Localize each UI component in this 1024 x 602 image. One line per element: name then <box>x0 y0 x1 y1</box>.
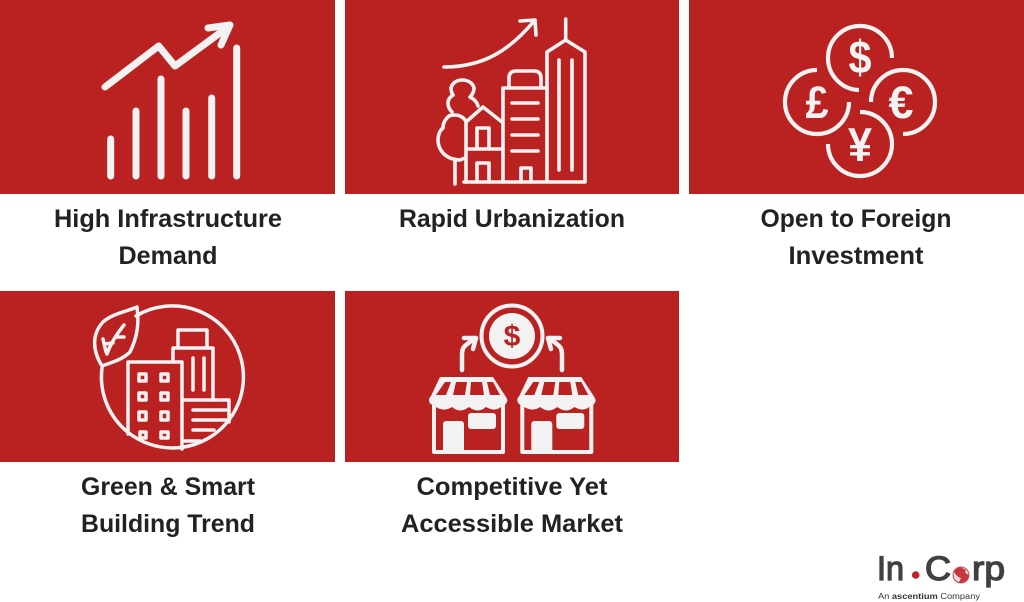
arrows <box>462 338 562 370</box>
panel: competitive yet accessible market <box>345 291 679 538</box>
wordmark: rp <box>972 550 1005 588</box>
wordmark: In <box>877 550 904 588</box>
globe <box>952 566 970 584</box>
icon: rising bar chart with arrow <box>105 25 237 176</box>
heading: Accessible Market <box>401 510 624 538</box>
icon: four currency coins: £ <box>806 77 828 128</box>
heading: Investment <box>788 242 924 270</box>
panel background <box>0 291 335 462</box>
wordmark <box>877 550 1005 588</box>
icon: four currency coins <box>785 26 935 176</box>
logo: InCorp <box>877 550 1005 601</box>
panel background <box>0 0 335 194</box>
panel background <box>345 291 679 462</box>
icon: buildings in circle with leaf <box>95 306 243 449</box>
heading: Open to Foreign <box>760 205 952 233</box>
tagline: An ascentium Company <box>878 591 981 601</box>
red dot <box>912 571 920 579</box>
heading: Building Trend <box>81 510 255 538</box>
panel background <box>689 0 1024 194</box>
panel: high infrastructure demand <box>0 0 335 270</box>
icon: four currency coins: $ <box>848 31 872 83</box>
icon: city skyline with growth arrow <box>438 19 585 184</box>
icon: two shops and a coin <box>429 306 596 453</box>
panel: green and smart building trend <box>0 291 335 538</box>
coin <box>482 306 542 366</box>
heading: Competitive Yet <box>416 473 608 501</box>
left shop <box>429 377 507 453</box>
coin: $ <box>504 320 521 353</box>
heading: High Infrastructure <box>54 205 282 233</box>
panel: rapid urbanization <box>345 0 679 233</box>
heading: Green & Smart <box>81 473 256 501</box>
icon: four currency coins: € <box>888 77 914 128</box>
icon: four currency coins: ¥ <box>848 118 872 171</box>
panel background <box>345 0 679 194</box>
heading: Rapid Urbanization <box>399 205 625 233</box>
panel: open to foreign investment <box>689 0 1024 270</box>
heading: Demand <box>118 242 218 270</box>
right shop <box>517 377 596 453</box>
wordmark: C <box>925 550 951 588</box>
